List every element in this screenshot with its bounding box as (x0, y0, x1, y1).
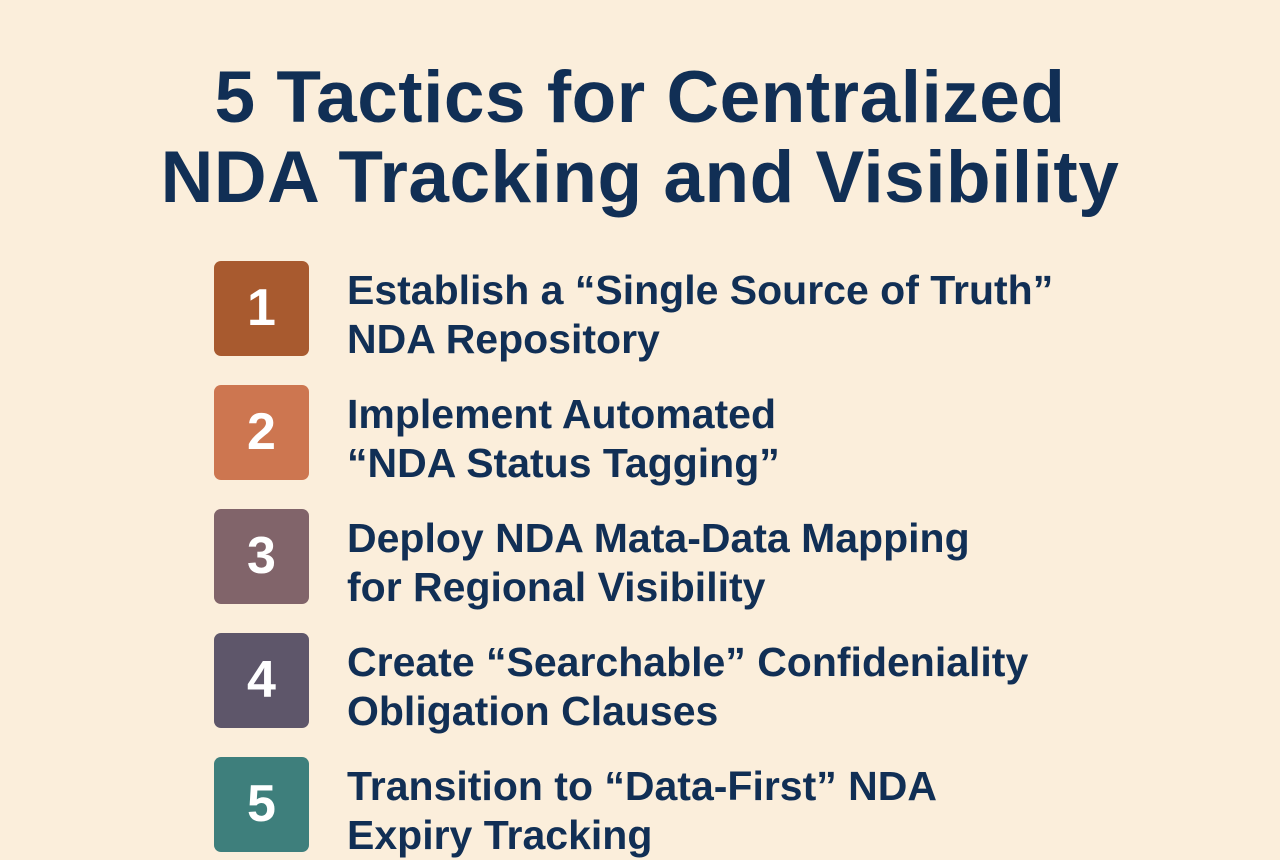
item 5 (214, 757, 937, 858)
text 3: Deploy NDA Mata-Data Mapping (347, 515, 970, 561)
icon: number 5 (214, 757, 309, 852)
text 4: Create “Searchable” Confideniality (347, 639, 1028, 685)
title: NDA Tracking and Visibility (161, 137, 1119, 218)
text 5 (347, 763, 937, 858)
text 1: Establish a “Single Source of Truth” (347, 267, 1053, 313)
title (161, 57, 1119, 218)
item 1 (214, 261, 1053, 362)
text 4: Obligation Clauses (347, 688, 718, 734)
text 5: Transition to “Data-First” NDA (347, 763, 937, 809)
text 4 (347, 639, 1028, 734)
icon: number 5: 5 (247, 775, 276, 833)
text 3: for Regional Visibility (347, 564, 765, 610)
title: 5 Tactics for Centralized (215, 57, 1065, 138)
item 3 (214, 509, 970, 610)
text 5: Expiry Tracking (347, 812, 652, 858)
icon: number 3: 3 (247, 527, 276, 585)
icon: number 1: 1 (247, 279, 276, 337)
text 2 (347, 391, 780, 486)
icon: number 2 (214, 385, 309, 480)
icon: number 1 (214, 261, 309, 356)
item 4 (214, 633, 1028, 734)
item 2 (214, 385, 780, 486)
icon: number 4 (214, 633, 309, 728)
text 2: Implement Automated (347, 391, 776, 437)
text 1: NDA Repository (347, 316, 660, 362)
text 2: “NDA Status Tagging” (347, 440, 780, 486)
icon: number 3 (214, 509, 309, 604)
icon: number 4: 4 (247, 651, 276, 709)
text 3 (347, 515, 970, 610)
icon: number 2: 2 (247, 403, 276, 461)
text 1 (347, 267, 1053, 362)
